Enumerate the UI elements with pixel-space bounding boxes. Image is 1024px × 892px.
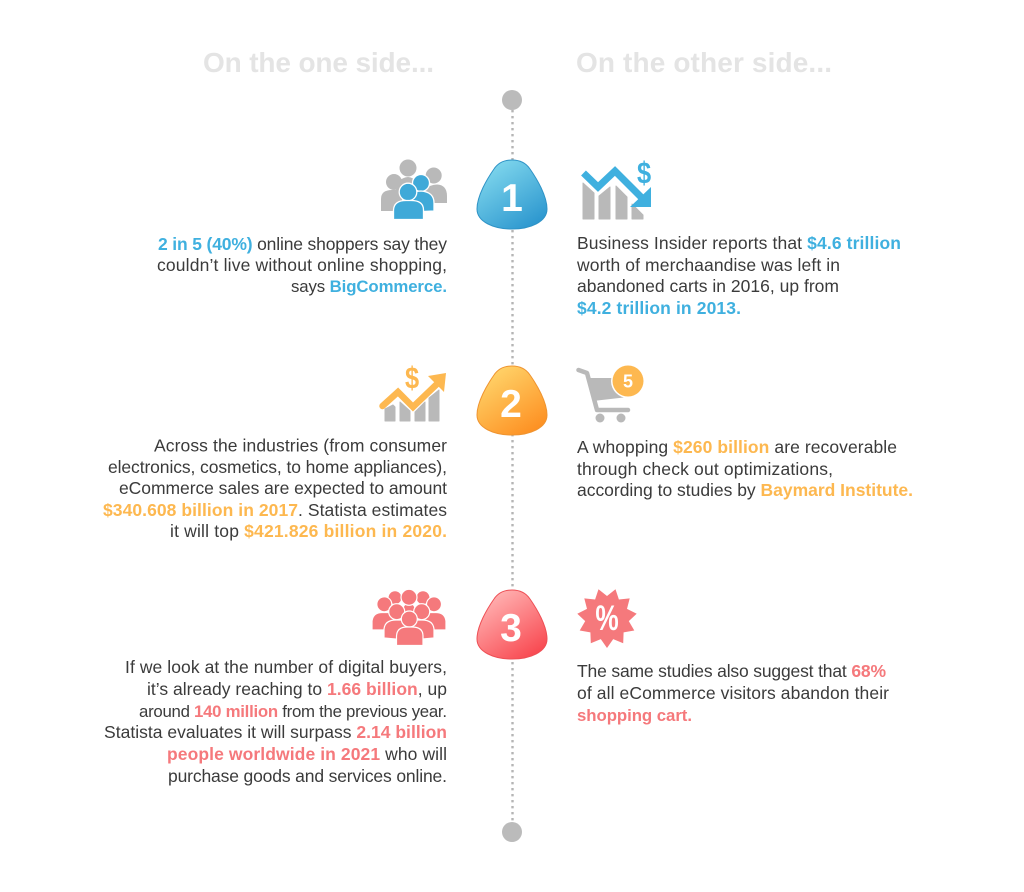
icon: cart with badge: 5 [623, 372, 633, 392]
icon: rising chart with dollar [382, 361, 446, 421]
text: ecommerce sales: $340.608 billion in 2017. Statista estimates [103, 500, 447, 520]
text: digital buyers: it’s already reaching to 1.66 billion, up [147, 679, 447, 699]
text: online shoppers: says BigCommerce. [291, 277, 447, 296]
text: recoverable: A whopping $260 billion are recoverable [577, 437, 897, 457]
text: abandon cart rate: The same studies also suggest that 68% [577, 661, 886, 681]
heading: on the other side: On the other side... [576, 47, 832, 78]
icon: percent badge: % [595, 598, 619, 638]
text: online shoppers [157, 234, 447, 296]
icon: crowd [372, 589, 446, 646]
badge 1: 1 [501, 177, 523, 220]
badge 2 [477, 366, 547, 435]
icon: rising chart with dollar: $ [405, 361, 419, 396]
text: online shoppers: couldn’t live without online shopping, [157, 255, 447, 275]
text: digital buyers: Statista evaluates it will surpass 2.14 billion [104, 722, 447, 742]
text: recoverable: according to studies by Baymard Institute. [577, 480, 913, 500]
icon: falling chart with dollar: $ [637, 156, 651, 191]
badge 3: 3 [500, 607, 522, 650]
badge 3 [477, 590, 547, 659]
text: abandoned carts: abandoned carts in 2016, up from [577, 276, 839, 296]
text: digital buyers [104, 657, 447, 786]
text: online shoppers: 2 in 5 (40%) online shoppers say they [158, 234, 447, 254]
icon: cart with badge [578, 364, 645, 422]
text: abandon cart rate: of all eCommerce visitors abandon their [577, 683, 889, 703]
text: recoverable [577, 437, 913, 500]
text: digital buyers: purchase goods and services online. [168, 766, 447, 786]
text: ecommerce sales: electronics, cosmetics, to home appliances), [108, 457, 447, 477]
text: digital buyers: people worldwide in 2021 who will [167, 744, 447, 764]
text: digital buyers: If we look at the number of digital buyers, [125, 657, 447, 677]
badge 2: 2 [500, 383, 522, 426]
text: recoverable: through check out optimizations, [577, 459, 833, 479]
icon: falling chart with dollar [583, 156, 651, 219]
icon: percent badge [577, 589, 637, 648]
timeline [502, 90, 522, 842]
text: digital buyers: around 140 million from the previous year. [139, 702, 447, 721]
text: abandoned carts: $4.2 trillion in 2013. [577, 298, 741, 318]
heading: on the one side: On the one side... [203, 47, 434, 78]
badge 1 [477, 160, 547, 229]
text: abandon cart rate [577, 661, 889, 725]
text: ecommerce sales: eCommerce sales are expected to amount [119, 478, 447, 498]
text: abandoned carts [576, 233, 901, 318]
text: ecommerce sales: Across the industries (from consumer [154, 436, 447, 456]
text: abandoned carts: Business Insider reports that $4.6 trillion [577, 233, 901, 253]
text: ecommerce sales: it will top $421.826 billion in 2020. [170, 521, 447, 541]
text: ecommerce sales [103, 436, 447, 541]
text: abandoned carts: worth of merchaandise was left in [576, 255, 840, 275]
icon: group of people [381, 160, 447, 220]
text: abandon cart rate: shopping cart. [577, 706, 692, 725]
